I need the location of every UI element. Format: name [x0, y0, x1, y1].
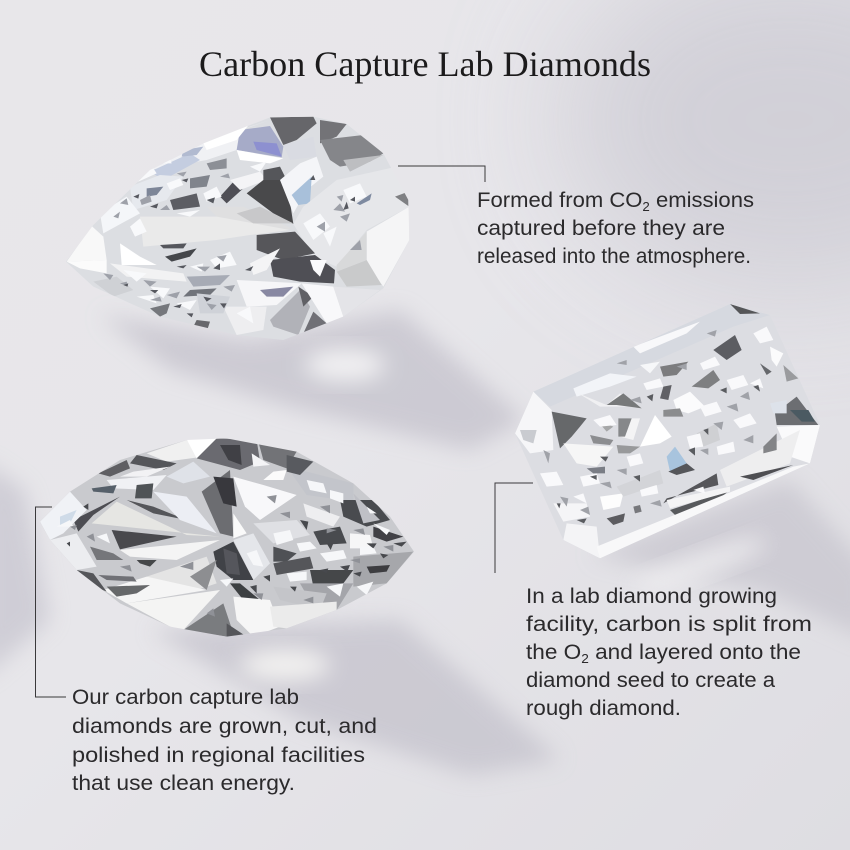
callout: growing facility: the O [526, 640, 579, 664]
callout: CO2 emissions: captured before they are [477, 216, 725, 240]
callout: clean energy [72, 685, 377, 795]
callout: growing facility: diamond seed to create a [526, 668, 775, 692]
callout: clean energy: diamonds are grown, cut, and [72, 714, 377, 738]
diamond: marquise [40, 438, 414, 636]
leader line: marquise callout [36, 507, 66, 697]
callout: CO2 emissions: 2 [642, 199, 650, 214]
callout: growing facility: In a lab diamond growing [526, 584, 777, 608]
leader line: pear callout [398, 166, 485, 182]
title: Carbon Capture Lab Diamonds [199, 44, 651, 84]
callout: clean energy: Our carbon capture lab [72, 685, 299, 709]
diamond shadows [0, 310, 850, 775]
callout: growing facility: and layered onto the [589, 640, 801, 664]
callout: CO2 emissions: released into the atmosphere. [477, 244, 751, 268]
callout: growing facility: 2 [581, 651, 589, 666]
leader line: radiant callout [495, 483, 533, 573]
callout: growing facility [526, 584, 812, 720]
callout: growing facility: facility, carbon is split from [526, 612, 812, 636]
callout: growing facility: rough diamond. [526, 696, 681, 720]
callout: clean energy: polished in regional facilities [72, 743, 365, 767]
callout: clean energy: that use clean energy. [72, 771, 295, 795]
callout: CO2 emissions: emissions [650, 188, 754, 212]
diamond: radiant [515, 304, 820, 558]
callout: CO2 emissions: Formed from CO [477, 188, 638, 212]
callout: CO2 emissions [477, 188, 754, 268]
diamond: pear [67, 116, 409, 340]
